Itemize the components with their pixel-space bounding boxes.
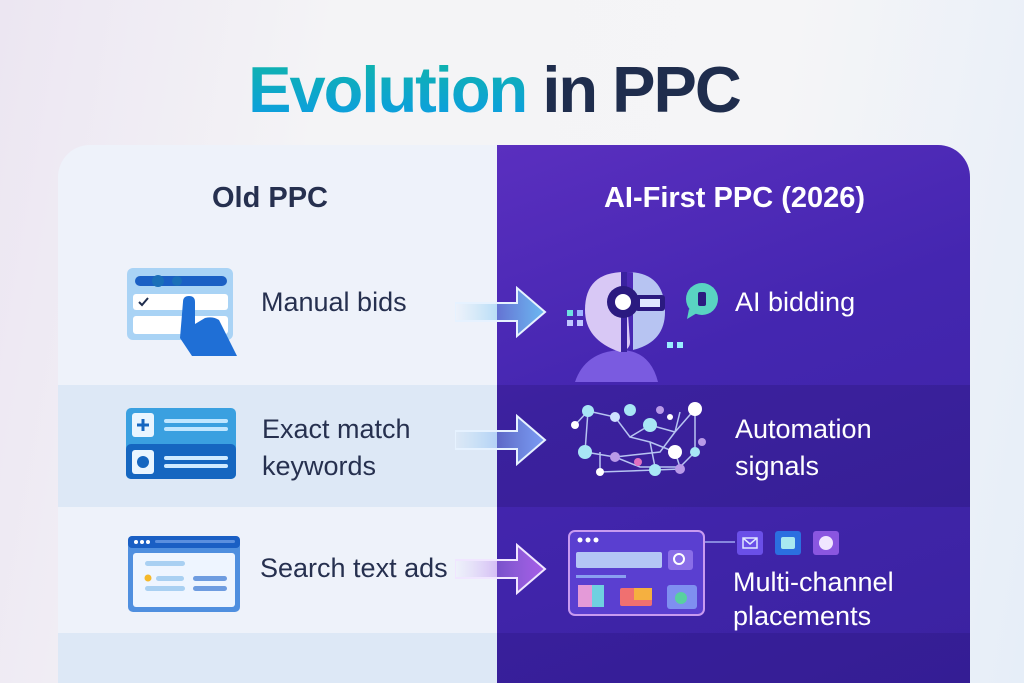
heading: AI-First PPC: AI-First PPC (2026) xyxy=(604,182,865,214)
text: AI bidding: AI bidding xyxy=(735,287,855,317)
text: Exact match keywords: Exact match xyxy=(262,414,411,444)
panel: comparison xyxy=(58,145,970,683)
text: Multi-channel placements xyxy=(733,567,894,631)
text: Multi-channel placements: placements xyxy=(733,601,871,631)
title: Evolution in PPC xyxy=(248,53,740,126)
text: Manual bids: Manual bids xyxy=(261,287,407,317)
heading: Old PPC: Old PPC xyxy=(212,182,328,214)
icon: manual bids xyxy=(127,268,237,356)
text: Automation signals: Automation xyxy=(735,414,872,444)
icon: channel icons xyxy=(705,531,839,555)
panel: old side backgrounds xyxy=(58,385,497,683)
icon: multi-channel window xyxy=(568,530,705,616)
text: Automation signals: signals xyxy=(735,451,819,481)
text: Search text ads: Search text ads xyxy=(260,553,448,583)
icon: chat bubble xyxy=(686,283,718,319)
arrow 2 xyxy=(455,414,546,466)
icon: keywords xyxy=(126,408,236,479)
icon: search ad window xyxy=(128,536,240,612)
arrow 1 xyxy=(462,286,546,338)
text: Exact match keywords: keywords xyxy=(262,451,376,481)
text: Automation signals xyxy=(735,414,872,481)
icon: network xyxy=(571,402,706,476)
text: Multi-channel placements: Multi-channel xyxy=(733,567,894,597)
arrow 3 xyxy=(455,543,546,595)
icon: AI robot xyxy=(567,272,683,382)
panel: AI side xyxy=(497,145,970,683)
text: Exact match keywords xyxy=(262,414,411,481)
